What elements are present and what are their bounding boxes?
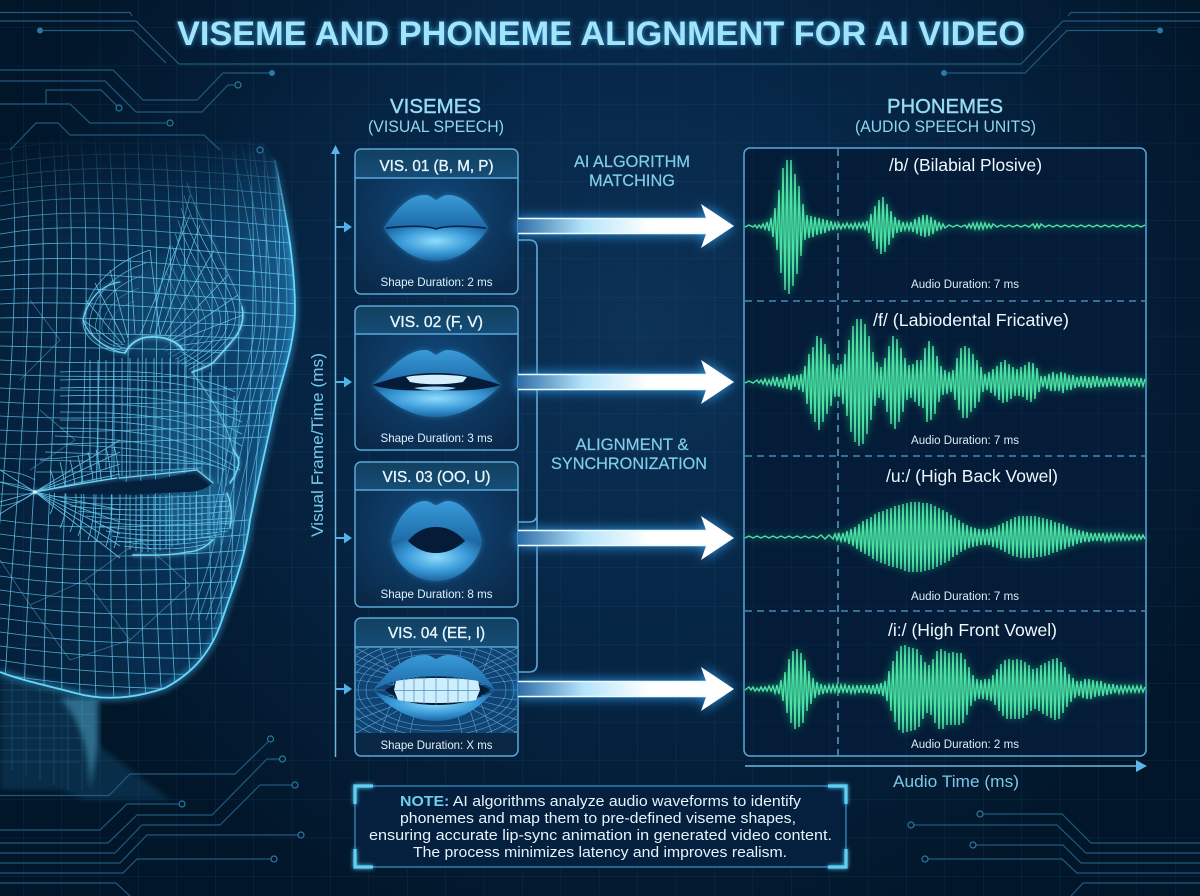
bright contours: nose and lips: [33, 183, 243, 555]
callout: note: [355, 786, 846, 867]
waveform: /b/: [745, 155, 1145, 294]
card: VIS. 04: VIS. 04 (EE, I): [388, 625, 485, 642]
circuit traces: top right: [941, 12, 1200, 76]
card: VIS. 03: [355, 462, 518, 607]
label: alignment and synchronization: ALIGNMENT &: [576, 436, 688, 454]
waveform: /f/: Audio Duration: 7 ms: [911, 435, 1019, 447]
card: VIS. 03: Shape Duration: 8 ms: [380, 587, 492, 601]
heading: phonemes: [855, 96, 1036, 136]
card: VIS. 02: [355, 306, 518, 450]
label: AI algorithm matching: [574, 153, 690, 190]
circuit traces: bottom right: [908, 811, 1200, 896]
nose mesh: [83, 195, 243, 369]
note text: NOTE: AI algorithms analyze audio waveforms to identify: [400, 793, 802, 810]
vertical axis: visual frame / time: [308, 145, 340, 757]
waveform: /b/: /b/ (Bilabial Plosive): [889, 155, 1042, 175]
lips: rounded open: [391, 501, 482, 581]
waveform: /i:/: /i:/ (High Front Vowel): [888, 620, 1057, 640]
card: VIS. 03: VIS. 03 (OO, U): [382, 469, 490, 486]
heading: visemes: [368, 96, 504, 136]
waveform: /f/: [745, 310, 1145, 447]
card: VIS. 02: Shape Duration: 3 ms: [380, 431, 492, 445]
axis tick arrows: [336, 222, 352, 694]
card: VIS. 02: VIS. 02 (F, V): [390, 314, 483, 331]
axis label: Audio Time (ms): [893, 772, 1019, 791]
panel: phonemes: [744, 148, 1146, 756]
glowing profile outline: [0, 160, 295, 698]
note text: [369, 793, 832, 861]
lip area glow: [110, 260, 240, 550]
title: VISEME AND PHONEME ALIGNMENT FOR AI VIDEO: [177, 15, 1025, 53]
arrow: viseme 3 to phoneme: [518, 516, 734, 560]
face mesh: [0, 140, 294, 697]
waveform: /f/: /f/ (Labiodental Fricative): [873, 310, 1069, 330]
connector bracket: [518, 240, 537, 672]
base mesh: [0, 109, 300, 690]
waveform: /u:/: [745, 466, 1145, 603]
heading: phonemes: PHONEMES: [887, 96, 1003, 118]
card: VIS. 01: Shape Duration: 2 ms: [380, 275, 492, 289]
heading: visemes: (VISUAL SPEECH): [368, 118, 504, 136]
callout corners: [355, 786, 846, 867]
card: VIS. 04: Shape Duration: X ms: [380, 738, 492, 752]
arrow: viseme 1 to phoneme: [518, 204, 734, 248]
lips: teeth on lip: [372, 350, 501, 417]
circuit traces: top left: [0, 12, 1200, 153]
waveform: /u:/: /u:/ (High Back Vowel): [886, 466, 1058, 486]
wireframe face illustration: [0, 140, 302, 802]
face shape: [0, 120, 295, 698]
note text: phonemes and map them to pre-defined viseme shapes,: [400, 810, 796, 827]
waveform: /i:/: [745, 620, 1145, 751]
mouth opening: [35, 470, 213, 494]
circuit traces: bottom left: [0, 736, 304, 896]
card: VIS. 04: [354, 617, 519, 757]
note text: ensuring accurate lip-sync animation in generated video content.: [369, 827, 832, 844]
label: alignment and synchronization: [551, 436, 707, 473]
waveform: /b/: Audio Duration: 7 ms: [911, 279, 1019, 291]
lips: wide teeth: [373, 655, 495, 721]
neck glow: [0, 672, 170, 800]
axis label: Visual Frame/Time (ms): [308, 353, 327, 537]
waveform: /i:/: Audio Duration: 2 ms: [911, 739, 1019, 751]
waveform: /u:/: Audio Duration: 7 ms: [911, 591, 1019, 603]
arrow: viseme 4 to phoneme: [518, 667, 734, 711]
label: AI algorithm matching: MATCHING: [589, 172, 675, 190]
lip fan mesh: [0, 440, 120, 558]
heading: phonemes: (AUDIO SPEECH UNITS): [855, 118, 1036, 136]
card: VIS. 01: VIS. 01 (B, M, P): [380, 158, 494, 175]
upper lip mesh: [36, 358, 242, 488]
lips: closed: [384, 195, 488, 261]
horizontal axis: audio time: [745, 760, 1147, 791]
label: AI algorithm matching: AI ALGORITHM: [574, 153, 690, 171]
cheek triangulation: [0, 300, 190, 660]
card: VIS. 01: [355, 149, 518, 294]
side strip mesh: [190, 120, 287, 620]
mesh backdrop: [356, 648, 517, 733]
label: alignment and synchronization: SYNCHRONIZATION: [551, 455, 707, 473]
nose wing mesh: [83, 250, 150, 353]
heading: visemes: VISEMES: [390, 96, 481, 118]
arrow: viseme 2 to phoneme: [518, 360, 734, 404]
note text: The process minimizes latency and improves realism.: [413, 844, 787, 861]
